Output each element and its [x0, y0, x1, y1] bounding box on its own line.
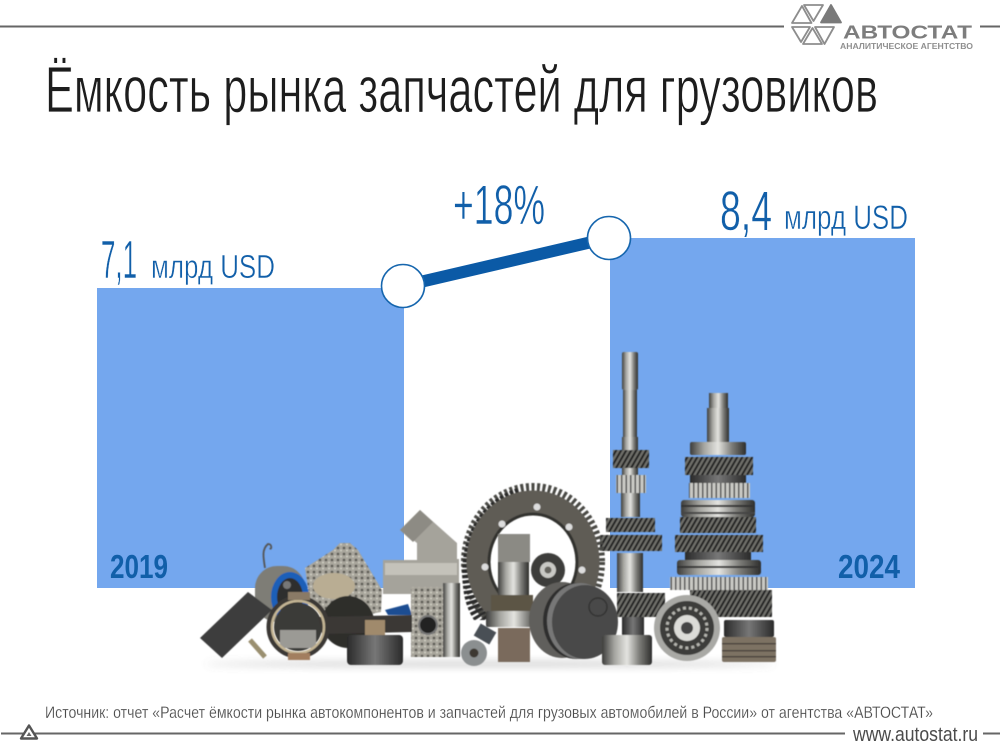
year label 2024: 2024 — [838, 548, 901, 585]
tall shaft — [600, 352, 665, 637]
friction drum — [722, 620, 776, 662]
engine block fragment — [411, 583, 460, 657]
value label 2024 — [720, 179, 908, 242]
stepped shaft — [486, 534, 542, 662]
logo triangles — [792, 5, 841, 44]
crank sensor — [461, 623, 496, 666]
logo wordmark: АВТОСТАТ — [843, 22, 972, 42]
bottom rule — [1, 732, 1000, 734]
website: www.autostat.ru — [852, 724, 978, 746]
connecting rod — [269, 592, 412, 660]
illustration: truck parts — [200, 352, 776, 667]
logo: Автостат — [792, 5, 973, 51]
value label 2024: млрд USD — [784, 199, 908, 237]
growth connector — [382, 216, 630, 308]
year label 2019: 2019 — [110, 548, 168, 585]
bearing — [654, 595, 720, 661]
bar 2019 — [97, 288, 404, 588]
small footer triangle icon — [21, 726, 37, 738]
start marker — [382, 264, 424, 308]
tensioner pulley — [255, 544, 309, 622]
round hub on plate — [313, 573, 355, 599]
value label 2019: 7,1 — [101, 230, 137, 290]
dark pulley behind the rod — [322, 596, 412, 648]
bolt — [250, 640, 265, 657]
casting plate — [305, 543, 382, 620]
gear stack — [670, 393, 772, 617]
small piston ring — [347, 635, 403, 665]
small cylinder — [602, 635, 652, 665]
roller cylinder — [200, 592, 272, 658]
value label 2024: 8,4 — [720, 179, 772, 242]
value label 2019: млрд USD — [151, 248, 275, 285]
thermostat housing — [383, 510, 459, 594]
logo tagline: АНАЛИТИЧЕСКОЕ АГЕНТСТВО — [840, 41, 973, 51]
small wheel — [531, 553, 565, 587]
end marker — [588, 216, 630, 260]
large ring gear — [465, 487, 601, 637]
bar 2024 — [610, 238, 915, 588]
piston — [529, 582, 618, 659]
growth label: +18% — [453, 173, 545, 236]
ground shadow — [205, 661, 775, 667]
top rule — [0, 26, 1000, 28]
value label 2019 — [101, 230, 275, 290]
